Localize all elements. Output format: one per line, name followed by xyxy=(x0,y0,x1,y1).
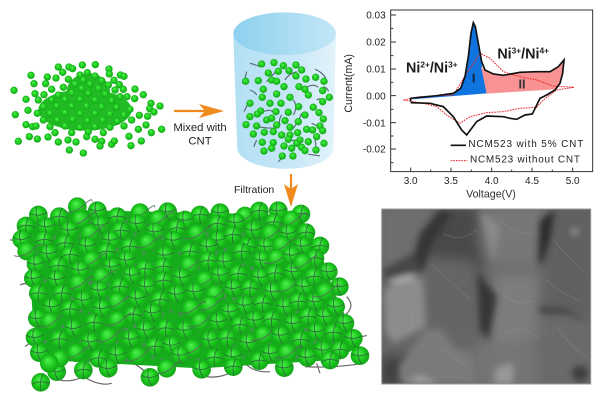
y axis tick labels: 0.01 xyxy=(366,65,386,76)
CNT fibres on the particles xyxy=(407,220,587,367)
label: region II: II xyxy=(518,78,526,92)
arrow: filtration xyxy=(284,174,298,207)
beaker body xyxy=(233,33,336,169)
CV chart xyxy=(343,10,593,200)
label: Ni2+/Ni3+: 2+ xyxy=(420,60,430,70)
x axis tick labels: 4.5 xyxy=(525,176,539,187)
beaker top xyxy=(233,12,336,55)
arrow: mixing xyxy=(174,104,224,118)
particle heap xyxy=(10,61,165,157)
x axis tick labels xyxy=(404,176,580,187)
beaker with suspended particles and CNT xyxy=(233,12,336,169)
label: Ni3+/Ni4+: 4+ xyxy=(539,45,549,55)
x axis tick labels: 5.0 xyxy=(566,176,580,187)
label: Ni3+/Ni4+: Ni xyxy=(497,46,512,62)
x axis title: Voltage(V) xyxy=(466,188,516,200)
peak II area xyxy=(481,60,564,94)
plot frame and ticks xyxy=(391,10,593,172)
NCM523 without CNT curve xyxy=(403,53,574,123)
y axis tick labels xyxy=(363,11,386,156)
y axis tick labels: 0.02 xyxy=(366,38,386,49)
particles xyxy=(242,59,333,160)
label: Ni2+/Ni3+: /Ni xyxy=(430,61,448,77)
label: Ni2+/Ni3+: 3+ xyxy=(448,60,458,70)
label: Ni2+/Ni3+: Ni xyxy=(406,61,420,77)
label: mixed with CNT: CNT xyxy=(188,136,212,148)
x axis tick labels: 3.5 xyxy=(444,176,458,187)
label: region I: I xyxy=(472,72,475,86)
CNT wires below the sheet xyxy=(10,240,367,384)
SEM frame xyxy=(382,209,591,384)
y axis tick labels: -0.02 xyxy=(363,145,386,156)
y axis tick labels: 0.00 xyxy=(366,91,386,102)
legend: NCM523 without CNT xyxy=(470,155,580,166)
label: Ni3+/Ni4+: 3+ xyxy=(512,45,521,55)
x axis tick labels: 4.0 xyxy=(485,176,499,187)
y axis title: Current(mA) xyxy=(343,54,355,113)
label: filtration: Filtration xyxy=(234,184,274,196)
x axis tick labels: 3.0 xyxy=(404,176,418,187)
SEM micrograph xyxy=(380,207,593,387)
NCM523 with CNT curve xyxy=(411,23,564,135)
y axis tick labels: 0.03 xyxy=(366,11,386,22)
label: mixed with CNT: Mixed with xyxy=(173,122,227,134)
dense particle underlayer xyxy=(25,210,360,368)
filtered CNT and particle sheet xyxy=(10,197,369,392)
carbon nanotubes xyxy=(243,63,328,162)
legend: NCM523 with 5% CNT xyxy=(468,139,583,150)
y axis tick labels: -0.01 xyxy=(363,118,386,129)
legend xyxy=(451,139,583,166)
peak I area xyxy=(412,23,487,99)
label: Ni3+/Ni4+: /Ni xyxy=(521,46,539,62)
